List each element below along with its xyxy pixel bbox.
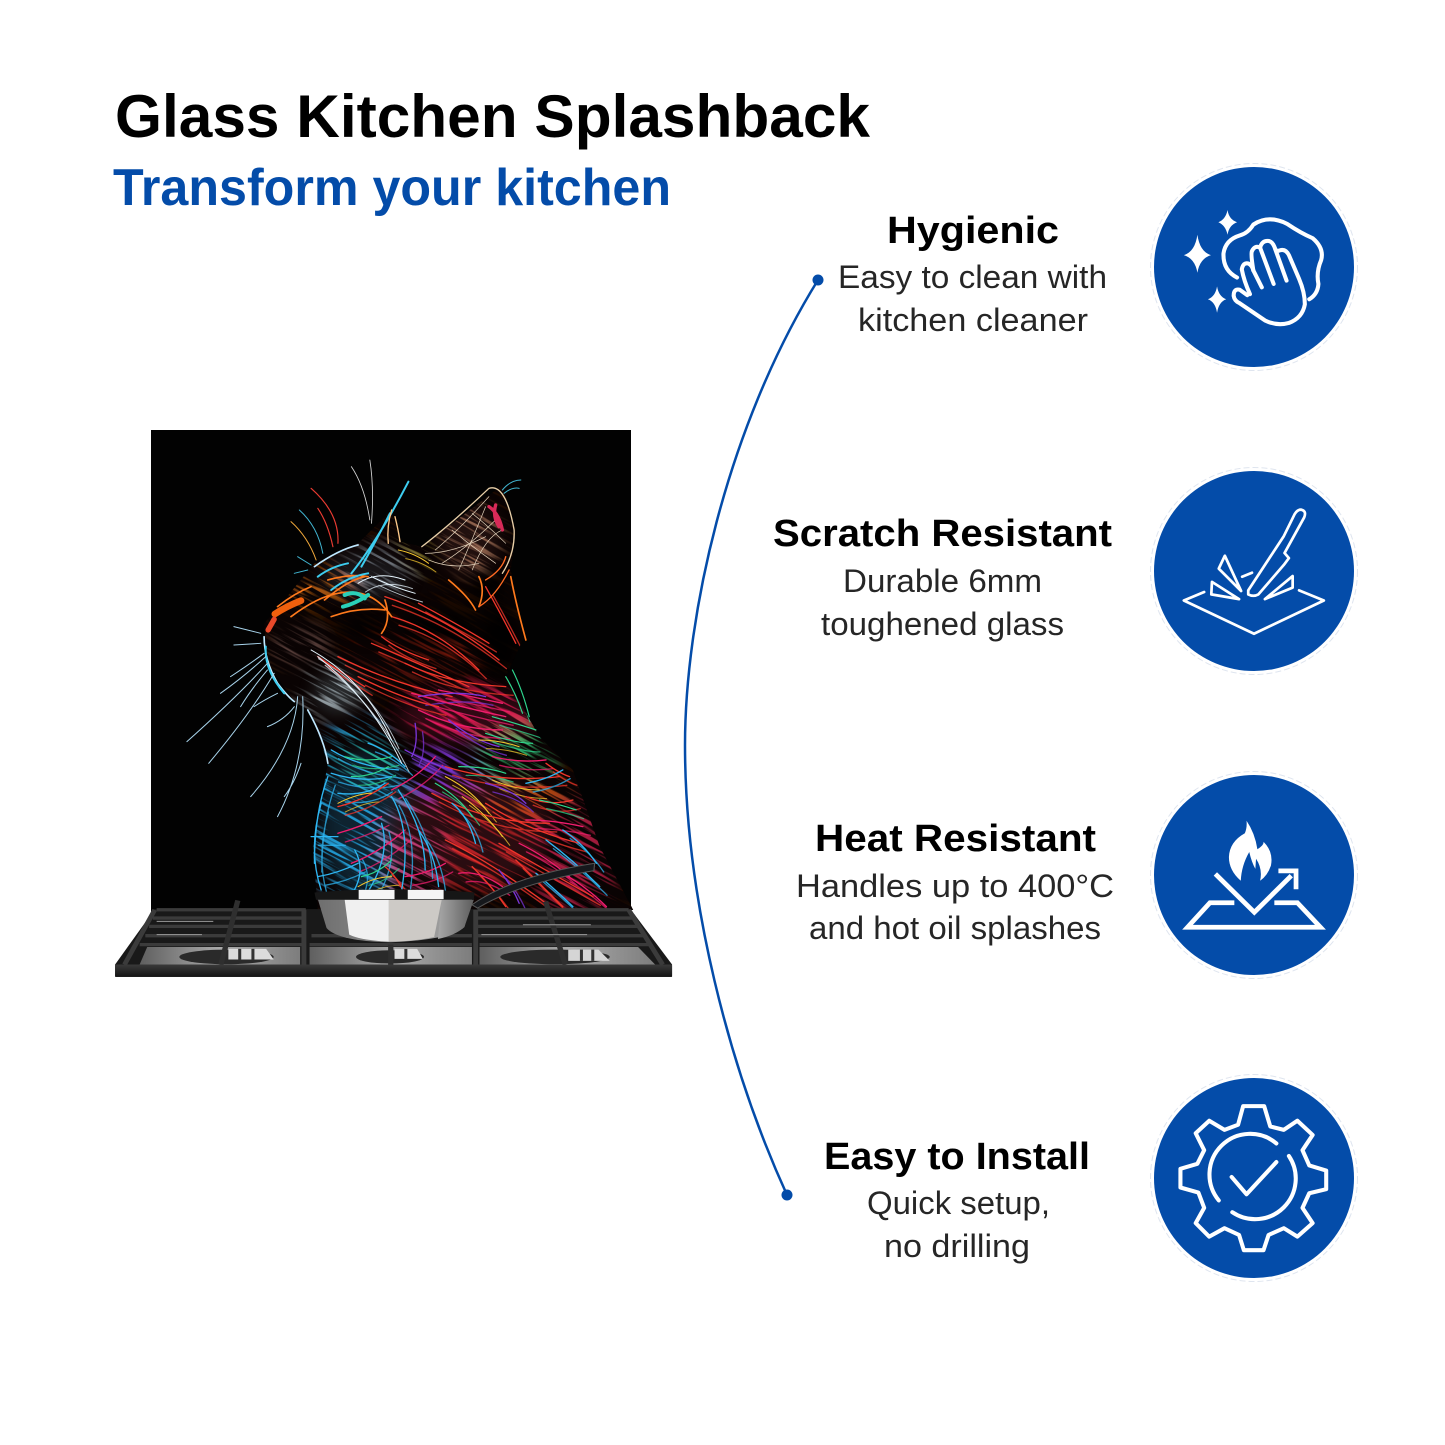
feature: heat resistant text: Handles up to 400°C <box>796 868 1114 904</box>
feature: heat resistant text: and hot oil splashes <box>809 910 1101 946</box>
dark patches on head and neck <box>341 575 519 677</box>
feature: heat resistant text <box>796 818 1114 946</box>
feature: hygienic text: Easy to clean with <box>838 259 1107 295</box>
feature: heat resistant text: Heat Resistant <box>815 818 1096 860</box>
feature: easy to install text: Easy to Install <box>824 1136 1090 1178</box>
fur strokes <box>311 550 606 907</box>
grates <box>125 900 663 965</box>
hob front edge <box>115 965 672 977</box>
feature: scratch resistant text: toughened glass <box>821 606 1064 642</box>
cat artwork <box>187 460 640 915</box>
feature: scratch resistant text: Durable 6mm <box>843 563 1042 599</box>
feature: easy to install text <box>824 1136 1090 1264</box>
feature: hygienic text <box>838 210 1107 338</box>
splashback panel <box>151 430 631 912</box>
icon: cleaning hand <box>1150 164 1358 370</box>
icon: gear with check <box>1150 1074 1358 1282</box>
frying pan <box>314 863 595 942</box>
feature: scratch resistant text: Scratch Resistant <box>773 513 1112 555</box>
title: Glass Kitchen Splashback <box>115 83 871 150</box>
subtitle: Transform your kitchen <box>113 159 671 217</box>
burner plates <box>140 947 655 965</box>
feature: easy to install text: no drilling <box>884 1228 1030 1264</box>
gas hob <box>115 863 672 977</box>
burners <box>179 949 610 964</box>
feature: scratch resistant text <box>773 513 1112 642</box>
icon: knife scratching glass <box>1150 468 1358 674</box>
whiskers <box>187 460 521 817</box>
product image: splashback and hob <box>115 430 672 977</box>
face outline and details <box>264 482 526 763</box>
connector curve <box>685 274 824 1200</box>
feature: easy to install text: Quick setup, <box>867 1185 1050 1221</box>
feature: hygienic text: kitchen cleaner <box>858 302 1088 338</box>
feature: hygienic text: Hygienic <box>887 210 1059 252</box>
icon: heat flame <box>1150 772 1358 978</box>
